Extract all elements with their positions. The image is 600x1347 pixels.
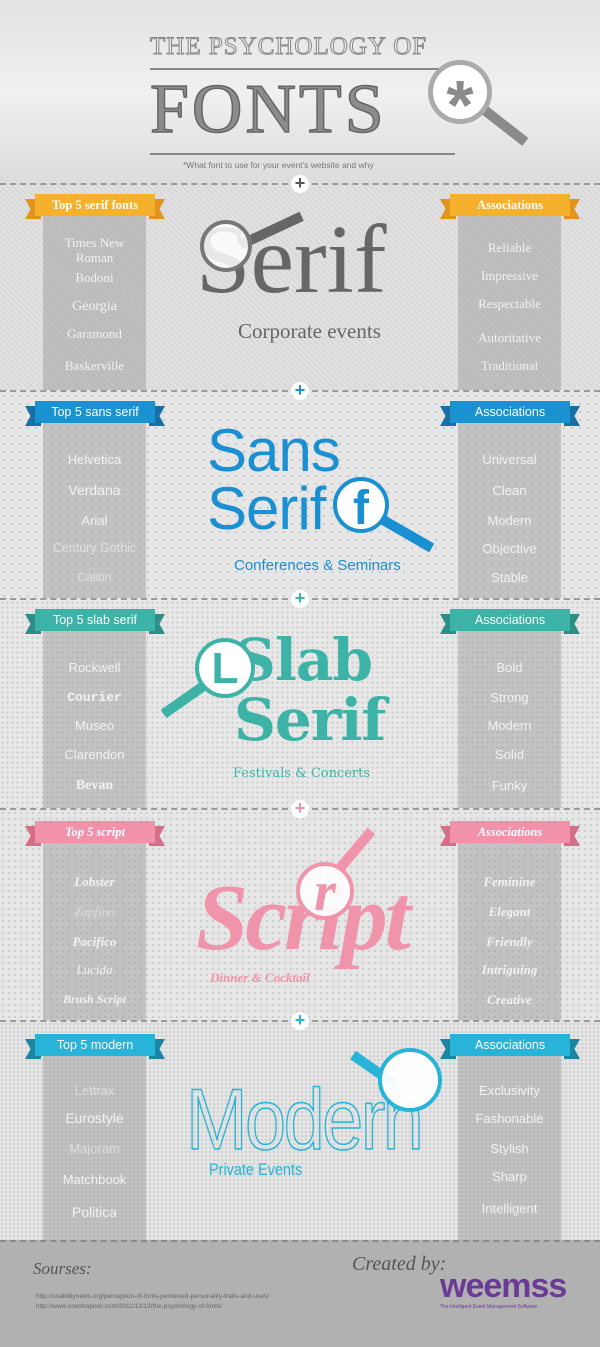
source links [36,1293,269,1310]
icon: magnifier [296,828,376,923]
panel: sans serif: Verdana [68,482,121,498]
column right: Impressive [481,268,538,283]
plus [291,175,309,193]
icon: magnifier asterisk: * [446,66,474,144]
heading Slab Serif: Slab [234,626,372,694]
panel: script: Creative [487,992,532,1007]
icon: magnifier: r [314,861,336,923]
panel: slab serif: Modern [487,718,532,733]
ribbon left [25,821,165,846]
ribbon left [25,194,165,219]
panel: modern: Majoram [69,1141,120,1156]
created by: Created by: [352,1253,446,1275]
panel: modern: Exclusivity [479,1083,540,1098]
heading Slab Serif: Serif [234,686,385,754]
panel: sans serif: Stable [491,570,528,585]
panel: sans serif: Century Gothic [53,541,136,555]
icon: magnifier [350,1048,442,1112]
subtitle: Conferences & Seminars [234,557,401,574]
footer [0,1240,600,1347]
panel: slab serif: Strong [490,690,529,705]
heading Sans Serif: Sans [207,417,340,484]
ribbon left [25,401,165,426]
panel: script: Elegant [489,904,530,919]
panel: slab serif: Clarendon [64,747,124,762]
column right: Respectable [478,296,541,311]
panel: script: Feminine [483,874,536,889]
icon: magnifier [333,477,434,552]
panel: sans serif: Helvetica [68,452,121,467]
panel: sans serif: Modern [487,513,532,528]
ribbon left: Top 5 sans serif [51,405,139,419]
title FONTS: FONTS [150,71,387,148]
source links: http://usabilitynews.org/perception-of-fonts-perceived-personality-traits-and-uses/ [36,1293,269,1300]
subtitle: Dinner & Cocktail [210,970,310,985]
column right: Reliable [488,240,531,255]
logo weemss: weemss [440,1267,566,1305]
icon: magnifier [160,638,255,718]
column right: Autoritative [478,330,541,345]
ribbon left [25,1034,165,1059]
icon: magnifier [200,212,304,272]
column right [458,207,561,392]
ribbon left: Top 5 modern [57,1038,133,1052]
panel: sans serif: + [295,380,305,400]
panel: modern: Politica [72,1204,117,1220]
panel: sans serif [0,390,600,598]
panel: modern: Lettrax [75,1083,114,1098]
panel: slab serif: Museo [75,718,114,733]
panel: sans serif: Universal [482,452,537,467]
ribbon right: Associations [475,405,545,419]
panel: sans serif: Objective [482,541,537,556]
subtitle: Festivals & Concerts [233,766,370,781]
panel: modern: Sharp [492,1169,527,1184]
subtitle: Corporate events [238,319,381,343]
panel: script: Intriguing [482,962,537,977]
column left: Georgia [72,299,117,314]
header [0,0,600,183]
panel: serif [0,183,600,390]
icon: magnifier: f [353,482,369,535]
ribbon right: Associations [475,613,545,627]
panel: script: Lucida [76,962,113,977]
source links: http://www.onextrapixel.com/2011/12/13/the-psychology-of-fonts/ [36,1303,222,1310]
ribbon left: Top 5 serif fonts [52,198,138,212]
ribbon right: Associations [477,198,543,212]
ribbon right [440,194,580,219]
ribbon right [440,821,580,846]
ribbon right [440,609,580,634]
column left: Bodoni [75,270,114,285]
panel: slab serif: Bevan [76,778,113,793]
column left [43,207,146,392]
subtitle: Private Events [209,1160,302,1179]
panel: modern [0,1020,600,1240]
subtitle: *What font to use for your event's website and why [183,160,374,170]
ribbon right: Associations [475,1038,545,1052]
icon: magnifier asterisk [428,60,528,146]
panel: modern: Eurostyle [65,1110,124,1126]
panel: slab serif [0,598,600,808]
panel: script: + [295,798,305,818]
heading Slab Serif [234,626,390,754]
panel: slab serif: Courier [67,690,122,705]
column left: Garamond [67,326,122,341]
heading Sans Serif [207,417,340,542]
panel: script: Pacifico [72,934,117,949]
ribbon right: Associations [478,825,542,839]
panel: modern: + [295,1010,305,1030]
ribbon left: Top 5 slab serif [53,613,137,627]
panel: modern: Stylish [490,1141,529,1156]
ribbon right [440,401,580,426]
panel: script: Friendly [486,934,533,949]
heading Serif: Serif [196,206,386,314]
panel: modern: Fashonable [476,1111,543,1126]
column right: Traditional [481,358,538,373]
panel: sans serif: Clean [493,483,526,498]
panel: script: Zapfino [74,904,115,919]
sources heading: Sourses: [33,1259,92,1278]
panel: slab serif: Rockwell [68,660,120,675]
heading Script: Script [196,866,408,970]
panel: modern: Intelligent [482,1201,537,1216]
ribbon left [25,609,165,634]
panel: sans serif: Calibri [77,570,112,584]
column left: Times New [65,235,124,250]
ribbon left: Top 5 script [65,825,125,839]
panel: script [0,808,600,1020]
panel: slab serif: Solid [495,747,524,762]
panel: slab serif: Funky [492,778,527,793]
panel: slab serif: + [295,588,305,608]
panel: slab serif: Bold [496,660,523,675]
icon: magnifier: L [212,644,238,693]
column left: Baskerville [65,358,124,373]
panel: script: Brush Script [63,992,126,1006]
ribbon right [440,1034,580,1059]
panel: script: Lobster [74,874,115,889]
logo weemss: The Intelligent Event Management Software [440,1304,537,1310]
plus: + [295,173,305,193]
panel: sans serif: Arial [81,513,108,528]
heading Sans Serif: Serif [207,475,325,542]
column left: Roman [76,250,113,265]
panel: modern: Matchbook [63,1172,126,1187]
